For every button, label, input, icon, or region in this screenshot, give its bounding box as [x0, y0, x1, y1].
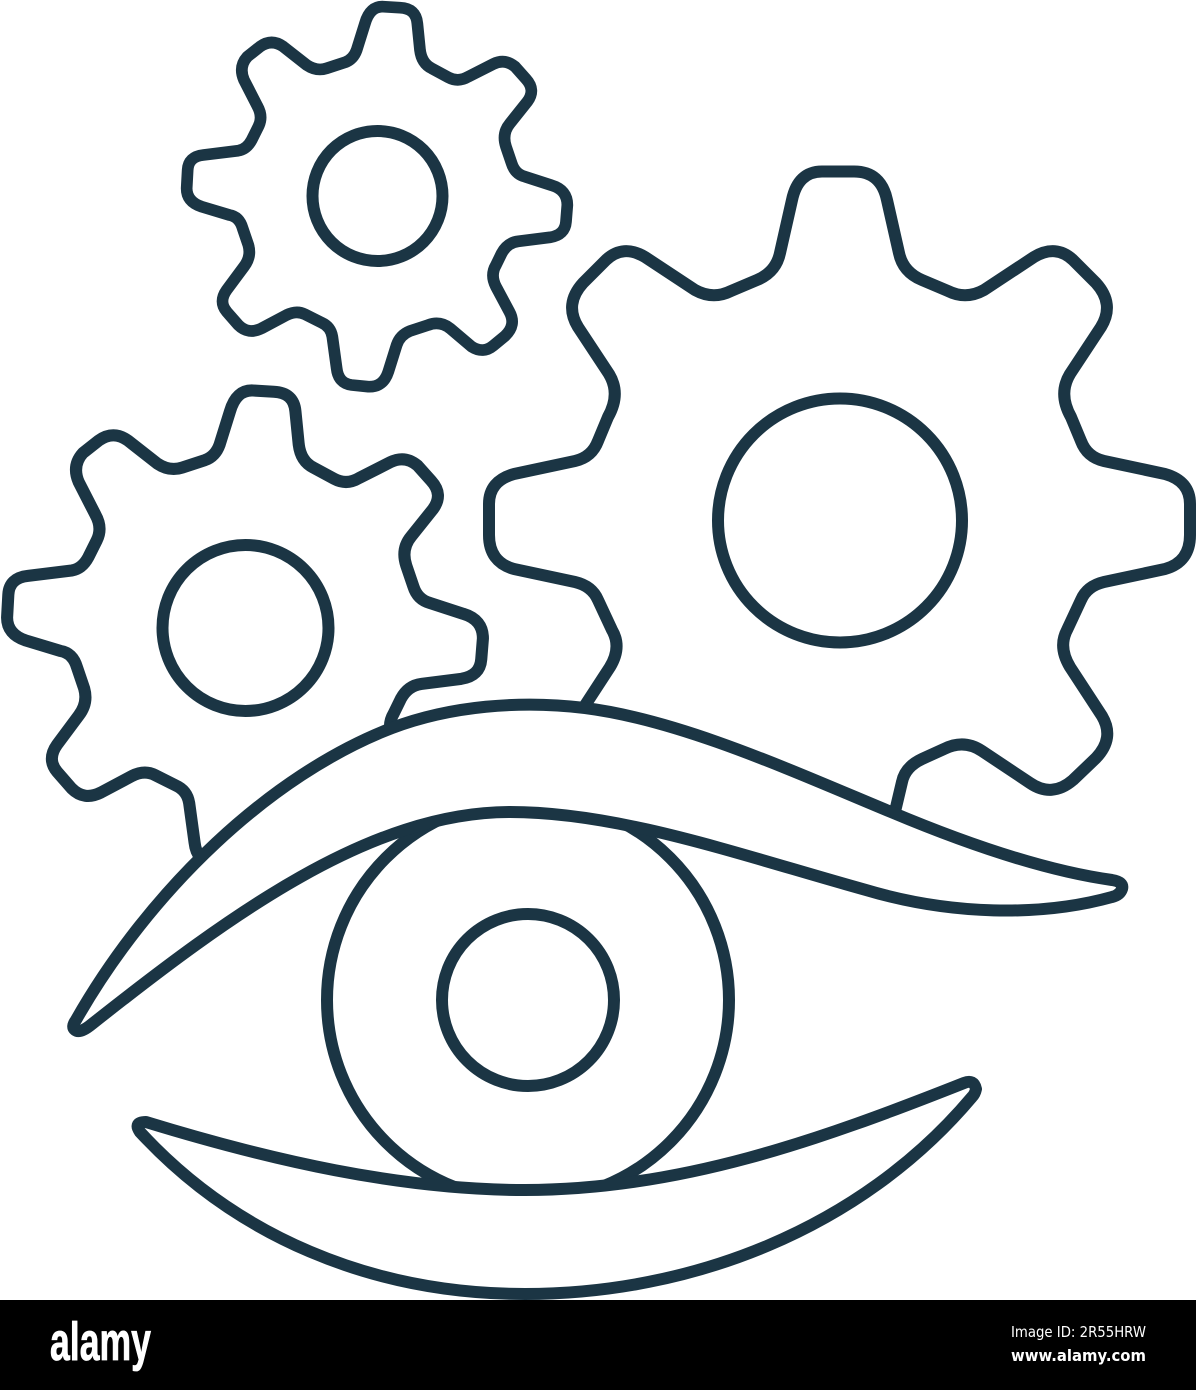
icon: eye pupil	[442, 914, 614, 1086]
logo: alamy: alamy	[50, 1312, 151, 1372]
icon: top small gear	[187, 7, 567, 387]
image id text: Image ID: 2R55HRW	[1011, 1323, 1146, 1341]
icon: lower eyelid	[138, 1082, 976, 1294]
icon: eye iris ring	[327, 799, 729, 1201]
icon: upper eyelid	[73, 705, 1122, 1031]
icon: left medium gear	[7, 390, 483, 866]
website text: www.alamy.com	[1011, 1346, 1146, 1365]
footer bar	[0, 1300, 1196, 1390]
icon: large gear	[489, 172, 1190, 820]
